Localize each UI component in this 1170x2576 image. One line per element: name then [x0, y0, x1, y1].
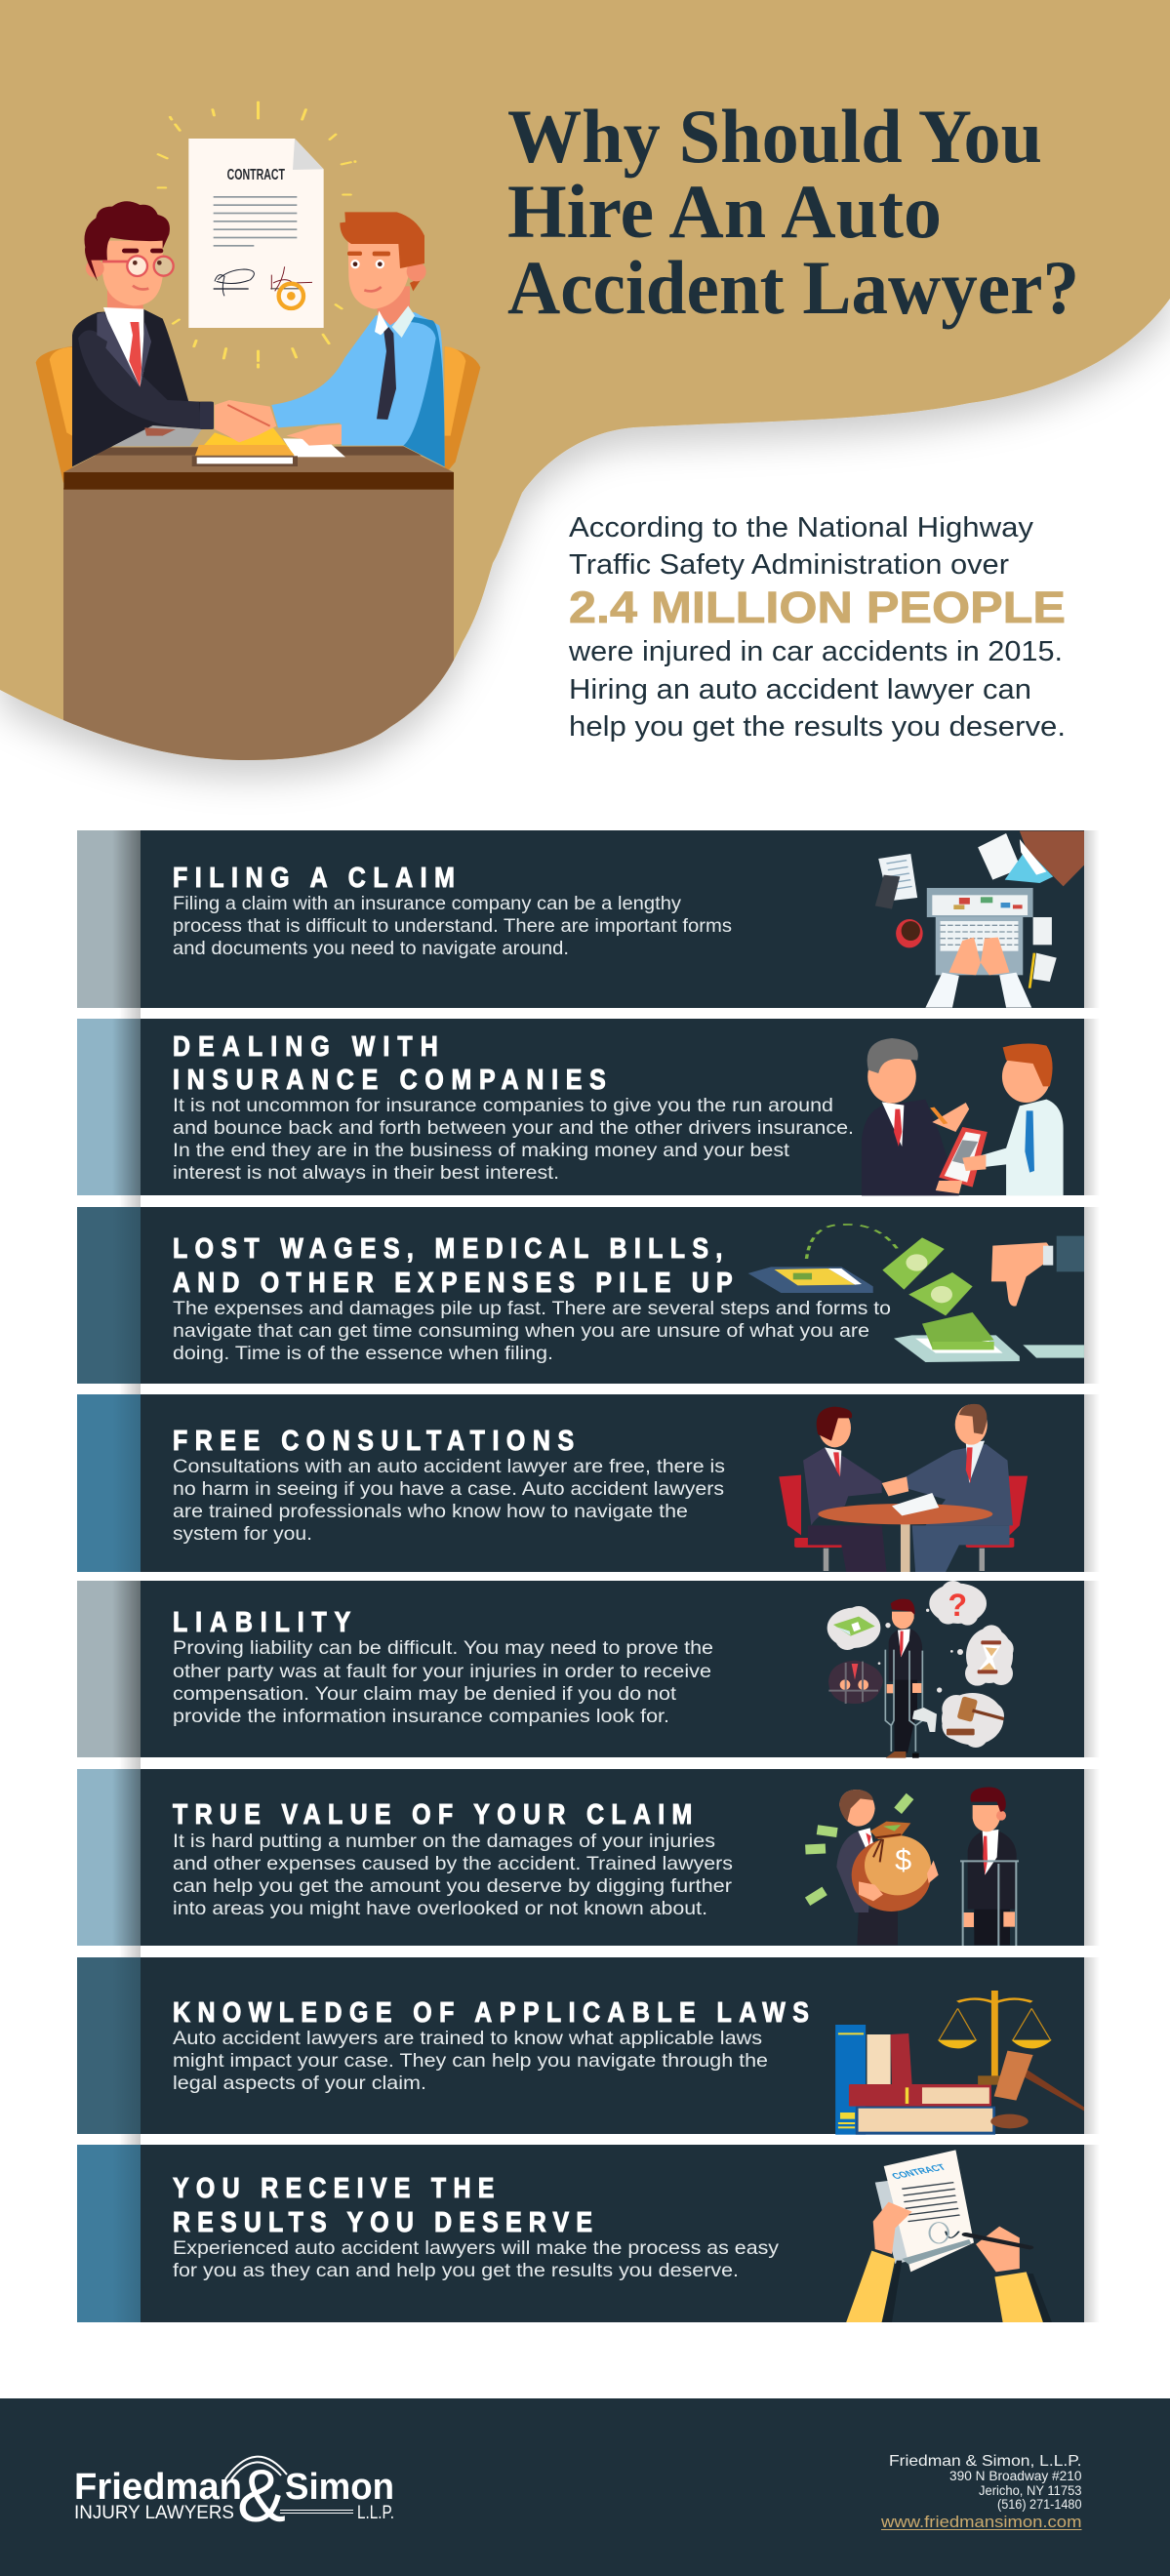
title: Why Should You: [507, 94, 1042, 179]
heading: DEALING WITH: [173, 1030, 438, 1062]
heading: [173, 2172, 592, 2237]
body text: are trained professionals who know how to navigate the: [173, 1501, 688, 1522]
panel: you receive the results you deserve: [77, 2145, 1100, 2322]
intro text: According to the National Highway: [569, 512, 1034, 543]
icon: injured man on crutches with thought clouds: ?: [948, 1588, 967, 1623]
body text: for you as they can and help you get the results you deserve.: [173, 2260, 739, 2281]
panel: knowledge of applicable laws: [77, 1957, 1100, 2145]
footer panel: [0, 2398, 1170, 2576]
body text: [173, 2237, 779, 2281]
body text: [173, 1298, 891, 1364]
illustration: lawyer and client shaking hands: [36, 139, 480, 490]
body text: system for you.: [173, 1523, 312, 1545]
body text: Consultations with an auto accident lawyer are free, there is: [173, 1456, 725, 1477]
body text: doing. Time is of the essence when filing.: [173, 1343, 553, 1364]
contact details: 390 N Broadway #210: [949, 2469, 1081, 2483]
body text: Filing a claim with an insurance company can be a lengthy: [173, 893, 681, 914]
heading: LIABILITY: [173, 1606, 350, 1637]
body text: The expenses and damages pile up fast. There are several steps and forms to: [173, 1298, 891, 1319]
body text: into areas you might have overlooked or not known about.: [173, 1898, 707, 1919]
icon: two businessmen at a round table: [779, 1404, 1028, 1572]
icon: sparkle rays: [158, 102, 355, 368]
intro text: Traffic Safety Administration over: [569, 549, 1010, 581]
body text: It is hard putting a number on the damages of your injuries: [173, 1831, 715, 1852]
intro text: Hiring an auto accident lawyer can: [569, 674, 1031, 705]
intro text: help you get the results you deserve.: [569, 711, 1066, 743]
figure: lawyer: [72, 201, 213, 466]
papers, book and handshake: [112, 400, 345, 466]
logo: Simon: [285, 2467, 394, 2508]
icon: lawyer with money bag beside injured client: $: [895, 1844, 911, 1877]
body text: [173, 1831, 733, 1919]
hero background shape: [0, 0, 1170, 760]
heading: FREE CONSULTATIONS: [173, 1425, 574, 1456]
heading: [173, 1232, 733, 1298]
panel: dealing with insurance companies: [77, 1019, 1100, 1207]
heading: AND OTHER EXPENSES PILE UP: [173, 1267, 733, 1298]
body text: and bounce back and forth between your and the other drivers insurance.: [173, 1117, 854, 1139]
panel: filing a claim: [77, 830, 1100, 1019]
chairs: [36, 346, 480, 483]
intro text: 2.4 MILLION PEOPLE: [569, 583, 1066, 632]
logo: L.L.P.: [357, 2503, 394, 2523]
body text: It is not uncommon for insurance companies to give you the run around: [173, 1095, 833, 1116]
body text: and documents you need to navigate around.: [173, 938, 569, 959]
heading: LOST WAGES, MEDICAL BILLS,: [173, 1232, 722, 1264]
panel: free consultations: [77, 1394, 1100, 1572]
body text: can help you get the amount you deserve by digging further: [173, 1875, 733, 1897]
intro text: [568, 512, 1066, 743]
icon: money moving between phones and thumbs down: [748, 1225, 1084, 1362]
icon: injured man on crutches with thought clouds: [827, 1581, 1014, 1758]
body text: [173, 893, 732, 959]
body text: process that is difficult to understand. There are important forms: [173, 915, 732, 937]
body text: no harm in seeing if you have a case. Auto accident lawyers: [173, 1478, 724, 1500]
body text: [173, 2028, 768, 2094]
body text: interest is not always in their best interest.: [173, 1162, 559, 1184]
heading: [173, 1030, 606, 1095]
body text: other party was at fault for your injuries in order to receive: [173, 1661, 711, 1682]
figure: client: [271, 212, 445, 466]
icon: contract: CONTRACT: [227, 167, 285, 183]
panel: liability: [77, 1581, 1100, 1769]
logo: Friedman: [74, 2467, 242, 2508]
heading: TRUE VALUE OF YOUR CLAIM: [173, 1798, 692, 1830]
body text: compensation. Your claim may be denied if you do not: [173, 1683, 677, 1705]
body text: Auto accident lawyers are trained to know what applicable laws: [173, 2028, 762, 2049]
intro text: were injured in car accidents in 2015.: [568, 636, 1063, 667]
title: Accident Lawyer?: [507, 245, 1079, 330]
icon: contract: [188, 139, 324, 328]
heading: YOU RECEIVE THE: [173, 2172, 494, 2203]
body text: Experienced auto accident lawyers will make the process as easy: [173, 2237, 779, 2259]
body text: navigate that can get time consuming when you are unsure of what you are: [173, 1320, 869, 1342]
icon: hands signing a contract: CONTRACT: [889, 2162, 948, 2181]
contact details: Friedman & Simon, L.L.P.: [889, 2453, 1081, 2470]
contact details: (516) 271-1480: [997, 2497, 1081, 2512]
desk body: [63, 488, 454, 781]
panel: true value of your claim: [77, 1769, 1100, 1957]
body text: Proving liability can be difficult. You may need to prove the: [173, 1637, 713, 1659]
heading: FILING A CLAIM: [173, 862, 455, 893]
title: Hire An Auto: [507, 169, 942, 254]
icon: hands signing a contract: [846, 2150, 1052, 2322]
logo: [74, 2455, 394, 2538]
logo: &: [237, 2455, 286, 2538]
heading: KNOWLEDGE OF APPLICABLE LAWS: [173, 1996, 809, 2028]
hero panel: [0, 0, 1170, 781]
title: [507, 94, 1079, 330]
body text: and other expenses caused by the accident. Trained lawyers: [173, 1853, 733, 1874]
icon: laptop and documents on desk: [875, 831, 1084, 1008]
heading: INSURANCE COMPANIES: [173, 1064, 606, 1095]
body text: might impact your case. They can help you navigate through the: [173, 2050, 768, 2072]
contact details: www.friedmansimon.com: [880, 2513, 1081, 2531]
icon: lawyer with money bag beside injured client: [805, 1788, 1019, 1946]
logo: INJURY LAWYERS: [74, 2503, 234, 2523]
panel: lost wages, medical bills: [77, 1207, 1100, 1394]
body text: [173, 1095, 854, 1184]
contact details: Jericho, NY 11753: [979, 2483, 1081, 2498]
body text: [173, 1456, 725, 1545]
body text: legal aspects of your claim.: [173, 2073, 426, 2094]
body text: provide the information insurance companies look for.: [173, 1706, 669, 1727]
contact details: [880, 2453, 1081, 2531]
body text: [173, 1637, 713, 1727]
heading: RESULTS YOU DESERVE: [173, 2206, 592, 2237]
icon: two men reviewing a clipboard: [862, 1038, 1064, 1195]
icon: law books, scales and gavel: [835, 1991, 1084, 2135]
desk top: [63, 446, 454, 490]
body text: In the end they are in the business of making money and your best: [173, 1140, 790, 1161]
